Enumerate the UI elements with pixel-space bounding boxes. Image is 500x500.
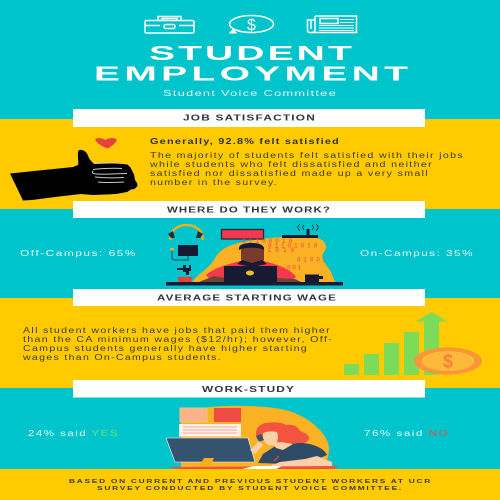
- icon: speech bubble with dollar: $: [247, 17, 256, 34]
- illustration: worker at laptop: 001: [287, 264, 302, 272]
- icon: newspaper: [308, 16, 356, 32]
- title: EMPLOYMENT: [94, 62, 408, 85]
- icon: heart: [95, 138, 117, 148]
- icon: speech bubble with dollar: [228, 16, 274, 34]
- banner: job satisfaction: [73, 109, 425, 127]
- banner: where do they work: [73, 201, 425, 218]
- banner: average starting wage: AVERAGE STARTING WAGE: [157, 294, 337, 302]
- title: STUDENT: [149, 42, 352, 65]
- text: satisfaction headline: Generally, 92.8% felt satisfied: [150, 137, 340, 146]
- subtitle: Student Voice Committee: [163, 89, 337, 98]
- label: yes share: 24% said YES: [28, 429, 119, 438]
- banner: where do they work: WHERE DO THEY WORK?: [167, 206, 331, 214]
- title: [94, 42, 408, 85]
- text: footer note: [69, 479, 432, 492]
- icon: coin: [414, 348, 482, 374]
- illustration: woman on phone at desk: [166, 406, 338, 469]
- band: starting wage background: [0, 298, 500, 388]
- label: no share: 76% said NO: [364, 429, 449, 438]
- icon: thumbs-up hand: [10, 150, 138, 200]
- text: satisfaction paragraph: The majority of students felt satisfied with their jobs: [150, 151, 464, 160]
- banner: job satisfaction: JOB SATISFACTION: [183, 114, 316, 122]
- chart: rising bars and arrow: [344, 312, 448, 375]
- label: on-campus share: On-Campus: 35%: [360, 249, 474, 258]
- band: job satisfaction background: [0, 119, 500, 209]
- illustration: worker at laptop: 01101010: [268, 242, 318, 250]
- text: satisfaction paragraph: satisfied nor dissatisfied made up a very small: [150, 169, 429, 178]
- text: wage paragraph: All student workers have jobs that paid them higher: [23, 326, 331, 335]
- illustration: worker at laptop: 01100010: [242, 238, 293, 245]
- icon: coin: $: [443, 352, 453, 372]
- text: wage paragraph: [22, 326, 333, 362]
- text: footer note: SURVEY CONDUCTED BY STUDENT VOICE COMMITTEE.: [97, 486, 403, 492]
- banner: average starting wage: [73, 289, 425, 306]
- text: satisfaction paragraph: [149, 151, 464, 187]
- illustration: worker at laptop: [166, 224, 343, 286]
- banner: work-study: WORK-STUDY: [202, 385, 295, 394]
- text: wage paragraph: than the CA minimum wages ($12/hr); however, Off-: [23, 335, 333, 344]
- text: footer note: BASED ON CURRENT AND PREVIOUS STUDENT WORKERS AT UCR: [69, 479, 432, 485]
- band: footer background: [0, 469, 500, 500]
- illustration: worker at laptop: 01010: [260, 247, 295, 254]
- label: off-campus share: Off-Campus: 65%: [20, 249, 137, 258]
- icon: briefcase: [145, 16, 194, 33]
- banner: work-study: [73, 380, 425, 398]
- text: satisfaction paragraph: number in the survey.: [150, 178, 278, 187]
- text: satisfaction paragraph: while students who felt dissatisfied and neither: [149, 160, 433, 169]
- illustration: worker at laptop: 01001: [297, 256, 327, 264]
- text: wage paragraph: Campus students generally have higher starting: [23, 344, 308, 353]
- text: wage paragraph: wages than On-Campus students.: [22, 353, 222, 362]
